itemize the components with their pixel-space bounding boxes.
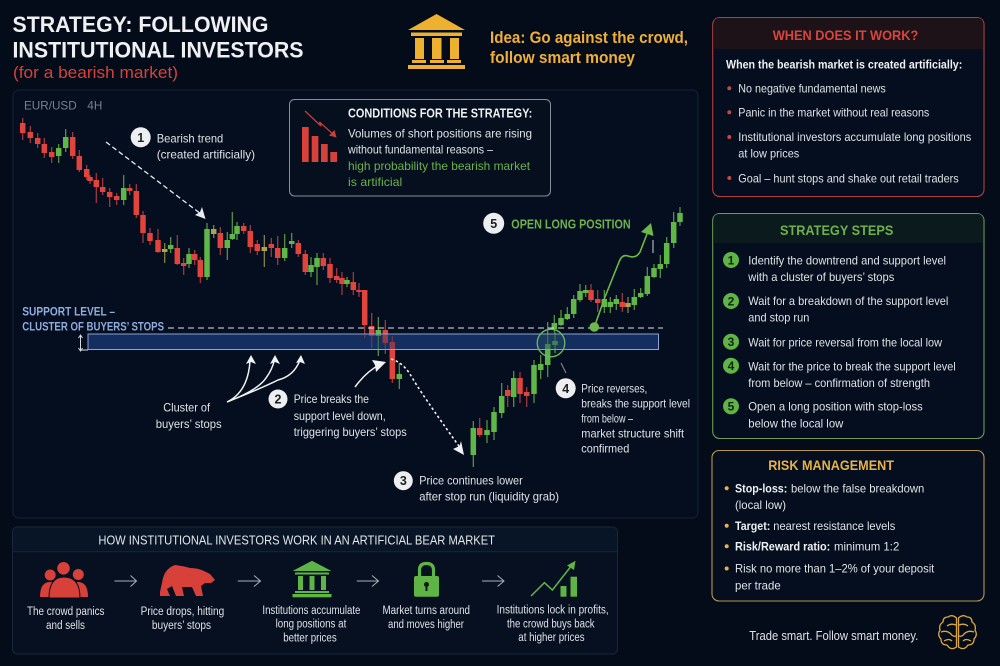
risk bullets [725, 482, 935, 592]
support band overlay [88, 334, 658, 350]
icon: band height marker [78, 335, 88, 351]
risk bullets: per trade [735, 578, 781, 592]
risk bullets: Stop-loss: [735, 482, 787, 496]
step 3: Wait for price reversal from the local low [748, 335, 942, 349]
conditions text [347, 106, 532, 189]
title: STRATEGY: FOLLOWING [12, 12, 268, 37]
annotation 5: open long position: 5 [490, 217, 497, 231]
panel: when does it work [713, 18, 984, 196]
process heading [13, 528, 617, 552]
annotation 1: bearish trend [131, 127, 255, 161]
step 1: 1 [728, 253, 735, 267]
when bullets: No negative fundamental news [738, 82, 886, 96]
step 4: market turns: Market turns around [382, 605, 470, 617]
cluster of stops label [156, 401, 222, 431]
arrow [238, 576, 260, 586]
risk bullets: Risk/Reward ratio: [735, 540, 830, 554]
idea text [490, 29, 688, 67]
step 3: 3 [728, 335, 735, 349]
leader line from circle [561, 363, 566, 373]
steps heading: STRATEGY STEPS [780, 222, 893, 238]
cluster of stops label: Cluster of [163, 401, 211, 415]
icon: falling volume bars [302, 111, 337, 162]
annotation 5: open long position [483, 213, 631, 234]
idea text: follow smart money [490, 49, 636, 67]
support level label: CLUSTER OF BUYERS’ STOPS [22, 321, 164, 333]
step 1: with a cluster of buyers’ stops [747, 270, 894, 284]
when intro: When the bearish market is created artificially: [726, 57, 962, 71]
annotation 2: break of support: triggering buyers’ stops [294, 425, 407, 439]
step 5: 5 [728, 400, 735, 414]
step 2: Wait for a breakdown of the support level [748, 294, 948, 308]
step 3: institutions accumulate: long positions at [276, 619, 347, 631]
step 5: lock in profits: the crowd buys back [507, 618, 595, 630]
step 2: 2 [728, 294, 735, 308]
step 3: institutions accumulate: Institutions accumulate [262, 605, 360, 617]
title: INSTITUTIONAL INVESTORS [12, 38, 304, 62]
risk heading: RISK MANAGEMENT [768, 457, 894, 473]
step 4: Wait for the price to break the support level [748, 359, 956, 373]
panel: how institutional investors work [12, 527, 618, 654]
annotation 2: break of support [268, 390, 407, 439]
when bullets: Panic in the market without real reasons [738, 106, 929, 120]
step 5: lock in profits: Institutions lock in profits, [497, 605, 609, 617]
annotation 3: liquidity grab: Price continues lower [419, 473, 523, 487]
annotation 2: break of support: support level down, [294, 409, 386, 423]
icon: lock [414, 564, 439, 597]
panel: risk management [712, 450, 984, 601]
icon: bear [160, 565, 215, 596]
conditions box [290, 100, 550, 196]
step 1: crowd panics: and sells [46, 620, 85, 632]
chart symbol label: 4H [87, 98, 102, 112]
annotation 4: reversal: market structure shift [581, 427, 685, 441]
step 5 [723, 398, 923, 430]
step 5: below the local low [748, 416, 844, 430]
icon: profit chart [531, 561, 577, 597]
icon: institution bank [408, 14, 465, 69]
arrow: bearish trend dashed [106, 142, 206, 219]
arrow: price continues lower dotted [391, 359, 464, 455]
process heading: HOW INSTITUTIONAL INVESTORS WORK IN AN ARTIFICIAL BEAR MARKET [98, 533, 495, 547]
step 4: market turns: and moves higher [388, 619, 464, 631]
step 4: market turns [382, 564, 470, 631]
arrow [114, 576, 136, 586]
conditions text: CONDITIONS FOR THE STRATEGY: [348, 106, 532, 120]
when heading: WHEN DOES IT WORK? [773, 27, 918, 43]
risk bullets: below the false breakdown [791, 482, 924, 496]
risk bullets: minimum 1:2 [834, 540, 900, 554]
annotation 1: bearish trend: (created artificially) [157, 147, 255, 161]
conditions text: is artificial [348, 175, 402, 189]
step 2: price drops [141, 565, 224, 632]
support dashed line [168, 327, 663, 329]
annotation 4: reversal [556, 378, 690, 456]
cluster of stops label: buyers’ stops [156, 417, 222, 431]
annotation 2: break of support: Price breaks the [294, 392, 369, 406]
conditions text: high probability the bearish market [348, 159, 531, 173]
step 4: from below – confirmation of strength [748, 376, 930, 390]
arrow: long position [590, 223, 654, 332]
panel: price chart [13, 90, 698, 518]
risk bullets: Target: [735, 519, 770, 533]
step 5: lock in profits [497, 561, 609, 644]
step 4 [723, 358, 956, 390]
idea text: Idea: Go against the crowd, [490, 29, 688, 47]
step 2: and stop run [748, 311, 809, 325]
footer tagline: Trade smart. Follow smart money. [749, 629, 918, 643]
risk bullets: nearest resistance levels [773, 519, 895, 533]
when bullets: at low prices [738, 147, 799, 161]
annotation 2: break of support: 2 [275, 392, 282, 406]
conditions text: without fundamental reasons – [347, 143, 493, 157]
annotation 4: reversal: 4 [562, 382, 569, 396]
annotation 3: liquidity grab: after stop run (liquidity grab) [419, 490, 559, 504]
step 1: Identify the downtrend and support level [748, 253, 946, 267]
step 2 [723, 293, 948, 325]
support level label [22, 307, 164, 333]
steps heading [713, 214, 983, 243]
step 2: price drops: Price drops, hitting [141, 606, 224, 618]
conditions text: Volumes of short positions are rising [348, 127, 532, 141]
step 3: institutions accumulate [262, 561, 360, 644]
step 1: crowd panics: The crowd panics [27, 606, 105, 618]
annotation 4: reversal: Price reverses, [581, 381, 647, 395]
step 3: institutions accumulate: better prices [283, 632, 337, 644]
annotation 5: open long position: OPEN LONG POSITION [511, 217, 631, 231]
when heading [713, 18, 983, 49]
icon: brain [939, 616, 976, 649]
annotation 1: bearish trend: Bearish trend [157, 131, 223, 145]
reversal circle [537, 329, 565, 357]
annotation 3: liquidity grab [394, 471, 559, 504]
annotation 3: liquidity grab: 3 [400, 474, 407, 488]
panel: strategy steps [713, 214, 984, 438]
support level label: SUPPORT LEVEL – [22, 307, 116, 319]
arrow [357, 576, 378, 586]
annotation 4: reversal: confirmed [581, 442, 629, 456]
arrow: to support break [355, 360, 386, 387]
arrow [482, 576, 504, 586]
step 5: Open a long position with stop-loss [748, 400, 923, 414]
when bullets [727, 82, 971, 185]
chart symbol label: EUR/USD [24, 98, 77, 112]
annotation 4: reversal: from below – [581, 412, 633, 426]
icon: green institution [292, 561, 332, 597]
chart symbol label [24, 98, 102, 112]
title: (for a bearish market) [13, 64, 178, 82]
support level band [88, 334, 658, 350]
arrow: cluster of stops [227, 355, 305, 402]
step 5: lock in profits: at higher prices [518, 632, 585, 644]
risk bullets: Risk no more than 1–2% of your deposit [735, 562, 935, 576]
step 1 [723, 252, 946, 284]
icon: crowd [40, 562, 88, 598]
candlesticks [23, 118, 680, 467]
step 4: 4 [728, 359, 735, 373]
step 2: price drops: buyers’ stops [152, 620, 211, 632]
when bullets: Institutional investors accumulate long positions [738, 130, 971, 144]
when bullets: Goal – hunt stops and shake out retail traders [738, 171, 959, 185]
annotation 1: bearish trend: 1 [137, 131, 144, 145]
title [12, 12, 304, 82]
step 1: crowd panics [27, 562, 105, 632]
risk bullets: (local low) [735, 498, 786, 512]
annotation 4: reversal: breaks the support level [581, 397, 690, 411]
